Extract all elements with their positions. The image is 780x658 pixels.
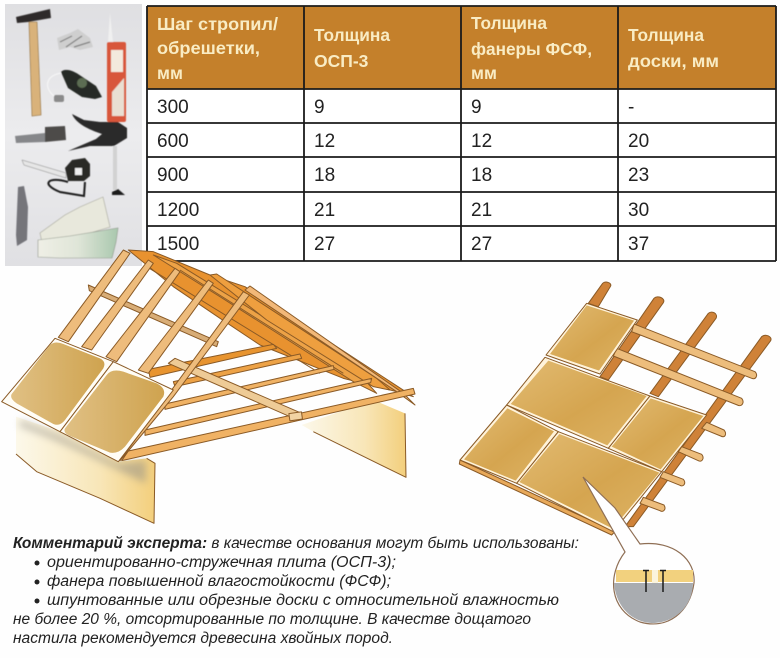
expert comment text: Комментарий эксперта: в качестве основания могут быть использованы: [13, 535, 579, 552]
table rows [157, 97, 649, 255]
expert comment text: настила рекомендуется древесина хвойных пород. [13, 630, 393, 647]
table rows: 37 [628, 234, 649, 255]
table rows: 12 [314, 131, 335, 152]
gray base layer [614, 583, 693, 623]
header: rafter pitch: мм [157, 63, 183, 83]
icon: wall plugs [57, 29, 93, 50]
table rows: 18 [314, 165, 335, 186]
sheathing panels [2, 338, 173, 462]
ceiling joists [122, 344, 415, 461]
table rows: 20 [628, 131, 649, 152]
expert comment text [13, 535, 579, 647]
table rows: - [628, 97, 634, 118]
table rows: 9 [471, 97, 482, 118]
sheathing layer [616, 570, 693, 582]
table rows: 30 [628, 200, 649, 221]
header: rafter pitch [157, 14, 278, 83]
left gable wall [16, 417, 155, 523]
header: OSB thickness [314, 25, 390, 71]
battens [613, 324, 757, 511]
panel: tools photo [5, 4, 142, 266]
table rows: 1500 [157, 234, 199, 255]
illustration: rafter roof frame [2, 250, 415, 523]
right gable wall [302, 400, 406, 477]
list item: plywood: фанера повышенной влагостойкости (ФСФ); [47, 573, 391, 590]
icon: hammer [16, 9, 51, 116]
table body [147, 89, 776, 261]
diagonal brace [168, 358, 302, 417]
header: plywood thickness: Толщина [471, 13, 547, 33]
header: board thickness [628, 25, 719, 71]
callout: fastening detail [583, 477, 694, 624]
icon: sealant gun [68, 13, 127, 195]
header: board thickness: доски, мм [628, 51, 719, 71]
icon: saw and tape measure [22, 158, 90, 196]
table rows: 21 [314, 200, 335, 221]
table rows: 18 [471, 165, 492, 186]
table rows: 27 [471, 234, 492, 255]
header: plywood thickness: мм [471, 63, 497, 83]
table rows: 23 [628, 165, 649, 186]
icon: spatula [15, 126, 66, 143]
header: plywood thickness: фанеры ФСФ, [471, 39, 592, 59]
illustration: sheathing over rafters [459, 282, 771, 535]
table rows: 600 [157, 131, 189, 152]
header: rafter pitch: Шаг стропил/ [157, 14, 278, 34]
table rows: 12 [471, 131, 492, 152]
ridge and right slope rafters [128, 250, 415, 405]
header: OSB thickness: ОСП-3 [314, 51, 369, 71]
list item: OSB: ориентированно-стружечная плита (ОСП-3); [47, 554, 396, 571]
table rows: 1200 [157, 200, 199, 221]
table: rafter pitch and thickness [147, 6, 776, 261]
icon: chalk line [48, 70, 102, 102]
table rows: 21 [471, 200, 492, 221]
list item: boards: шпунтованные или обрезные доски с относительной влажностью [47, 592, 559, 609]
table header [147, 6, 776, 89]
pointer and circle outline [583, 477, 694, 624]
icon: work gloves [38, 197, 118, 258]
table rows: 300 [157, 97, 189, 118]
table rows: 900 [157, 165, 189, 186]
table rows: 9 [314, 97, 325, 118]
icon: utility knife [16, 186, 28, 246]
nails [643, 570, 666, 592]
header: plywood thickness [471, 13, 592, 83]
back purlin [88, 285, 218, 347]
expert comment text: не более 20 %, отсортированные по толщине. В качестве дощатого [13, 611, 531, 628]
header: rafter pitch: обрешетки, [157, 38, 260, 58]
table rows: 27 [314, 234, 335, 255]
header: board thickness: Толщина [628, 25, 704, 45]
sheathing boards [459, 303, 707, 535]
front rafters [58, 250, 249, 461]
rafters [588, 282, 771, 527]
header: OSB thickness: Толщина [314, 25, 390, 45]
